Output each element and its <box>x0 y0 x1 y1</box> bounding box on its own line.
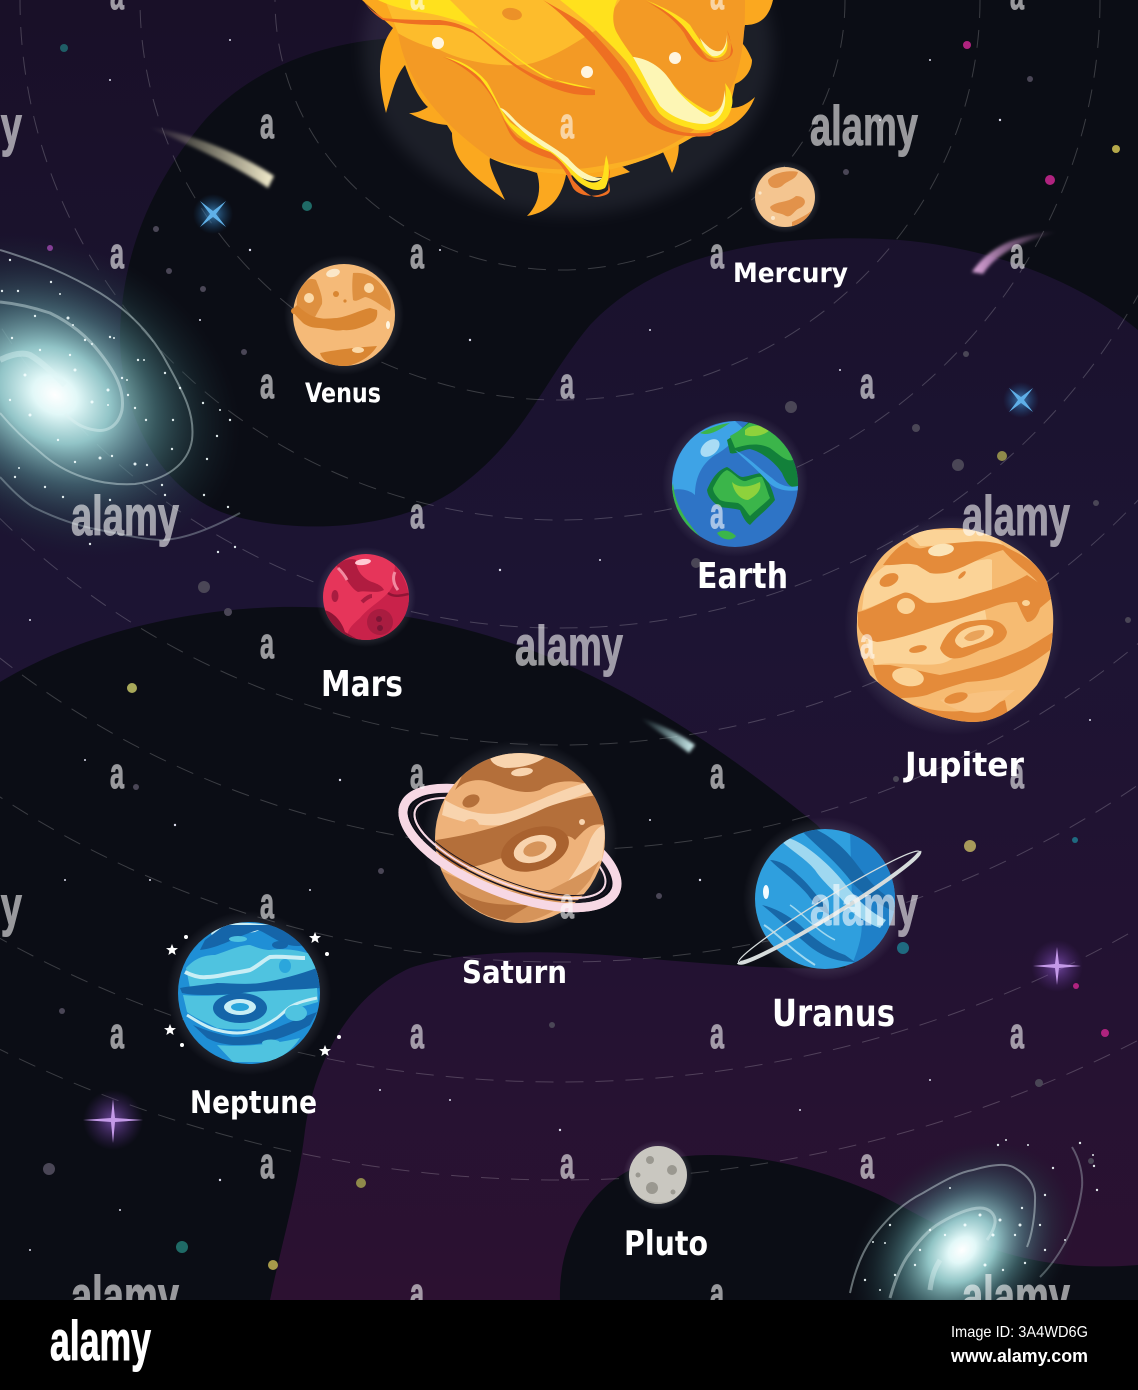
galaxy: upper left <box>0 168 299 622</box>
saturn ring: back <box>387 764 633 932</box>
watermark: repeated alamy marks: a <box>110 229 124 278</box>
planet: Jupiter <box>850 521 1058 728</box>
sun white dots <box>432 37 444 49</box>
sparkle: blue upper left <box>193 194 233 234</box>
watermark: repeated alamy marks: a <box>260 879 274 928</box>
planet: Mercury <box>751 163 819 231</box>
jupiter storm eye <box>940 620 1007 658</box>
watermark: repeated alamy marks: a <box>1010 1009 1024 1058</box>
label: Uranus: Uranus <box>772 992 895 1035</box>
planet: Uranus <box>734 817 924 981</box>
watermark: repeated alamy marks: a <box>560 359 574 408</box>
watermark: repeated alamy marks: a <box>260 359 274 408</box>
sparkle: purple left <box>83 1090 143 1150</box>
sun <box>362 0 773 216</box>
watermark: repeated alamy marks: a <box>410 489 424 538</box>
watermark: repeated alamy marks: alamy <box>962 484 1070 547</box>
galaxy glow <box>806 1096 1118 1390</box>
watermark: repeated alamy marks: alamy <box>962 1264 1070 1327</box>
label: Mars: Mars <box>321 664 403 705</box>
sun stream: long <box>363 0 595 95</box>
galaxy glow <box>0 168 299 622</box>
watermark: repeated alamy marks: a <box>410 229 424 278</box>
watermark: repeated alamy marks: a <box>110 1009 124 1058</box>
watermark: repeated alamy marks: a <box>410 1269 424 1318</box>
watermark: repeated alamy marks: a <box>110 749 124 798</box>
uranus ring <box>734 844 924 970</box>
watermark: repeated alamy marks: alamy <box>71 1264 179 1327</box>
footer logo: alamy <box>50 1309 151 1372</box>
galaxy: lower right <box>806 1096 1118 1390</box>
sun body <box>385 0 745 174</box>
sun stream: right <box>643 0 733 62</box>
planet: Neptune <box>164 911 341 1075</box>
galaxy spiral arms <box>850 1147 1082 1298</box>
watermark: repeated alamy marks: a <box>1010 749 1024 798</box>
jupiter cream bands <box>862 555 992 610</box>
planet: Saturn <box>398 745 622 931</box>
label: Saturn: Saturn <box>462 955 567 991</box>
label: Mercury: Mercury <box>733 258 848 289</box>
watermark: repeated alamy marks: a <box>260 1139 274 1188</box>
watermark: repeated alamy marks: a <box>410 749 424 798</box>
dark nebula region: lower left <box>0 607 852 1300</box>
label: Earth: Earth <box>697 556 788 597</box>
neptune stars <box>164 932 341 1056</box>
footer url: www.alamy.com <box>950 1346 1088 1366</box>
watermark: repeated alamy marks: alamy <box>515 614 623 677</box>
sun spot <box>501 6 523 22</box>
sun light band <box>380 0 620 65</box>
planet: Mars <box>319 550 413 644</box>
watermark: repeated alamy marks: a <box>860 359 874 408</box>
footer bar <box>0 1300 1138 1390</box>
footer image id: Image ID: 3A4WD6G <box>951 1324 1088 1341</box>
dark nebula region: upper <box>120 0 1138 526</box>
sun flames <box>362 0 773 216</box>
comet: cream <box>148 127 274 188</box>
planet: Earth <box>666 415 804 553</box>
watermark: repeated alamy marks: a <box>710 749 724 798</box>
jupiter dark bands <box>883 541 1052 608</box>
sun stream: lower <box>443 57 610 197</box>
saturn bands <box>455 754 590 792</box>
watermark: repeated alamy marks: a <box>710 489 724 538</box>
sparkle: blue right <box>1003 382 1039 418</box>
watermark: repeated alamy marks: a <box>710 1009 724 1058</box>
comet: blue <box>640 718 695 753</box>
watermark: repeated alamy marks: a <box>560 1139 574 1188</box>
galaxy spiral arms <box>0 250 240 540</box>
watermark: repeated alamy marks: a <box>860 1139 874 1188</box>
planet: Pluto <box>625 1142 691 1208</box>
sun glow <box>363 0 773 215</box>
watermark: repeated alamy marks: a <box>860 619 874 668</box>
watermark: repeated alamy marks: a <box>560 99 574 148</box>
label: Pluto: Pluto <box>624 1224 708 1264</box>
sparkle: purple right <box>1031 940 1083 992</box>
watermark: repeated alamy marks: alamy <box>71 484 179 547</box>
watermark: repeated alamy marks: alamy <box>810 94 918 157</box>
watermark: repeated alamy marks: a <box>710 229 724 278</box>
saturn ring: front <box>387 805 616 932</box>
label: Jupiter: Jupiter <box>903 745 1025 784</box>
sun lower rim <box>490 130 702 174</box>
planet: Venus <box>284 255 404 375</box>
label: Neptune: Neptune <box>190 1085 317 1121</box>
watermark: repeated alamy marks: alamy <box>810 874 918 937</box>
watermark: repeated alamy marks: a <box>410 1009 424 1058</box>
jupiter craters <box>928 544 954 556</box>
dark nebula region: bottom right <box>560 1155 1138 1300</box>
earth continent: top right <box>727 421 801 487</box>
watermark: repeated alamy marks: a <box>710 1269 724 1318</box>
galaxy stars <box>1 259 236 553</box>
saturn storm eye <box>501 826 569 872</box>
watermark: repeated alamy marks: a <box>260 99 274 148</box>
earth continent: centre <box>707 467 775 525</box>
sun stream: big <box>543 0 732 137</box>
watermark: repeated alamy marks: a <box>560 879 574 928</box>
galaxy stars <box>864 1139 1098 1291</box>
watermark: repeated alamy marks: a <box>1010 229 1024 278</box>
comet: pink <box>972 232 1058 274</box>
watermark: repeated alamy marks: a <box>260 619 274 668</box>
label: Venus: Venus <box>305 378 381 409</box>
